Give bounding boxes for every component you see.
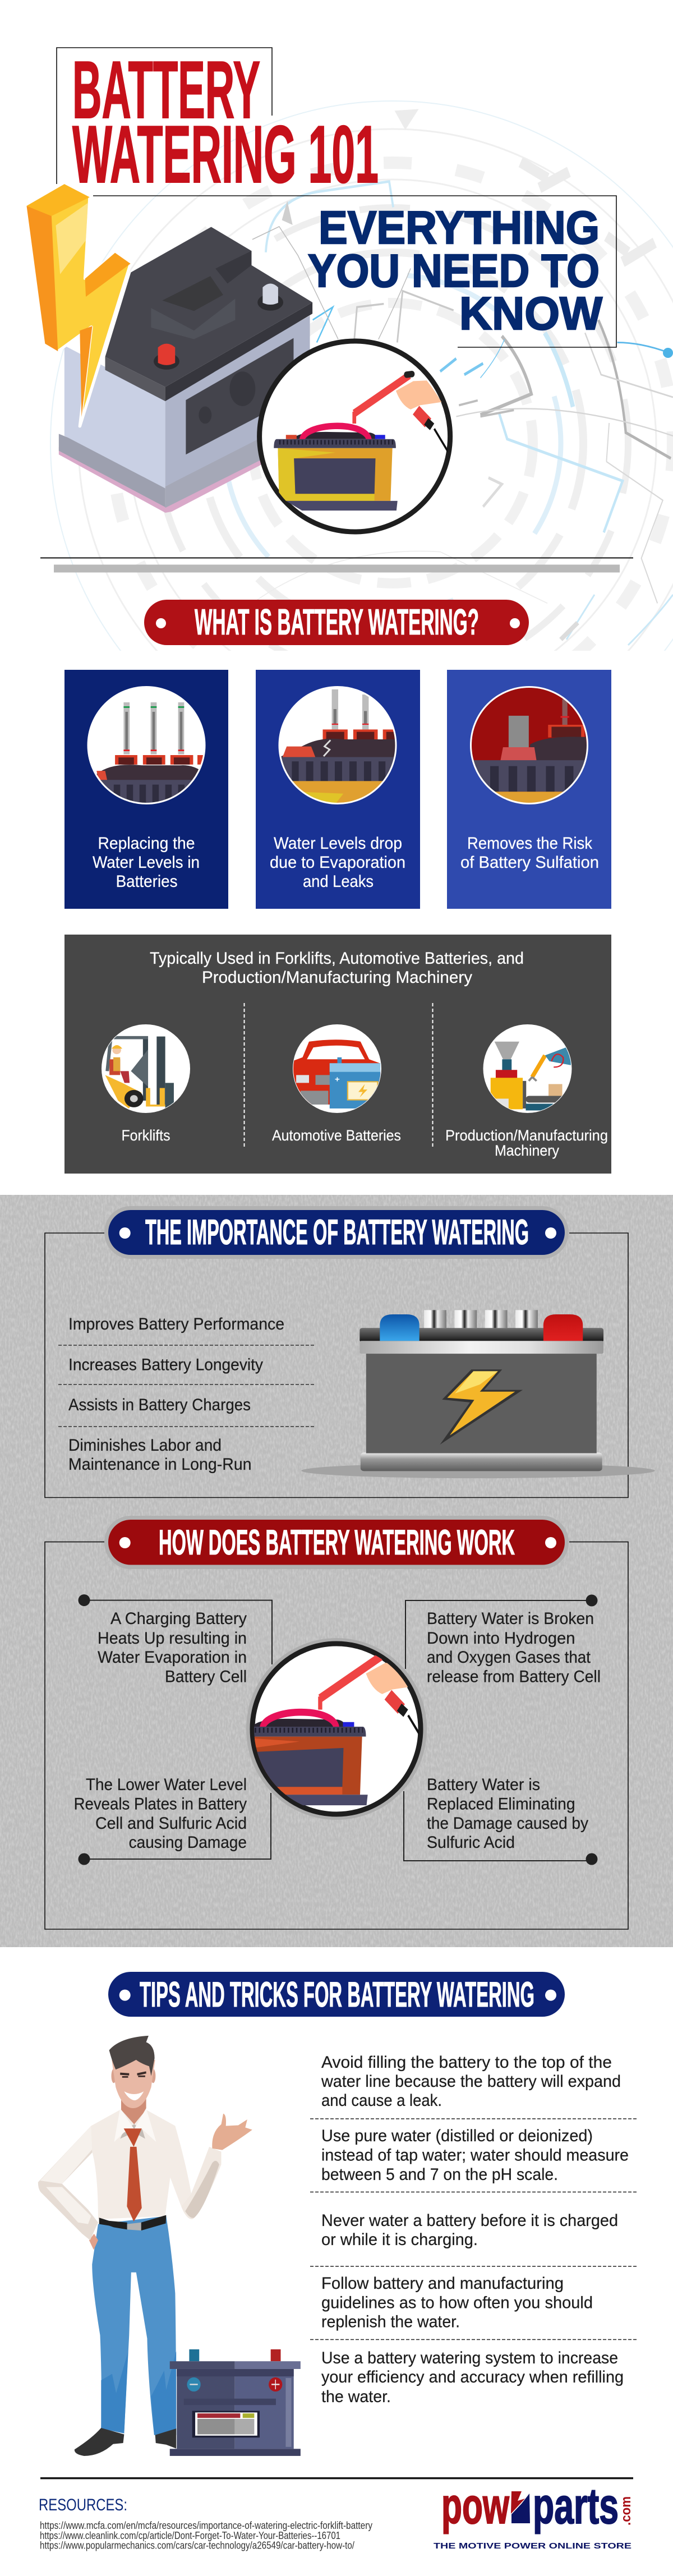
heading pill: What is battery watering [144, 600, 529, 645]
step 1 text: Battery Cell [165, 1668, 247, 1686]
logo: powerparts: parts [533, 2478, 619, 2534]
tip 1 [321, 2053, 621, 2110]
tip 4: Follow battery and manufacturing [321, 2274, 564, 2293]
subtitle: Everything you need to know: YOU NEED TO [308, 245, 600, 297]
tip 2 [321, 2127, 629, 2184]
tip 5: Use a battery watering system to increase [321, 2349, 618, 2367]
list: importance benefits: Increases Battery Longevity [68, 1355, 263, 1374]
title: Battery Watering 101: BATTERY [72, 44, 260, 135]
logo: powerparts: pow [441, 2478, 510, 2534]
title: Battery Watering 101: WATERING 101 [72, 109, 379, 200]
illustration: large car battery with lightning bolt [26, 184, 312, 513]
step 3 text: causing Damage [129, 1833, 247, 1852]
resources heading: RESOURCES: [39, 2496, 127, 2514]
tip 2: between 5 and 7 on the pH scale. [321, 2165, 558, 2184]
text: removes the risk [460, 834, 599, 872]
illustration: watering gun over low-water battery in circle [246, 1638, 427, 1820]
step 2 text [427, 1609, 601, 1686]
text: water levels drop: and Leaks [303, 872, 374, 891]
text: replacing the water levels [93, 834, 200, 891]
heading pill: tips and tricks [108, 1972, 565, 2017]
panel: water levels drop [256, 670, 420, 909]
step 2 text: release from Battery Cell [427, 1668, 601, 1686]
panel: replacing the water levels [64, 670, 228, 909]
footer rule [40, 2477, 633, 2479]
logo: powerparts: THE MOTIVE POWER ONLINE STORE [434, 2542, 631, 2551]
step 4 text: Battery Water is [427, 1775, 540, 1794]
icon: car battery: + [335, 1075, 340, 1084]
connector: step 3 [79, 1793, 271, 1865]
connector dot in background [663, 348, 673, 358]
icon: battery with sulfation [470, 687, 588, 806]
text: water levels drop: due to Evaporation [270, 853, 405, 872]
step 4 text: Sulfuric Acid [427, 1833, 515, 1852]
tip 1: and cause a leak. [321, 2091, 442, 2110]
icon: production machinery [483, 1024, 572, 1113]
step 4 text [427, 1775, 588, 1852]
resources links: https://www.cleanlink.com/cp/article/Dont-Forget-To-Water-Your-Batteries--16701 [40, 2530, 340, 2541]
list: importance benefits: Assists in Battery Charges [68, 1396, 251, 1414]
tip 1: Avoid filling the battery to the top of the [321, 2053, 612, 2072]
title: Battery Watering 101 [72, 44, 379, 200]
step 4 text: Replaced Eliminating [427, 1795, 575, 1813]
tip 1: water line because the battery will expand [321, 2072, 621, 2091]
text: water levels drop: Water Levels drop [274, 834, 402, 853]
icon: car battery [292, 1024, 382, 1113]
subtitle: Everything you need to know: EVERYTHING [319, 201, 600, 254]
panel: removes the risk of sulfation [447, 670, 611, 909]
step 2 text: Battery Water is Broken [427, 1609, 594, 1628]
tip 4 [321, 2274, 593, 2331]
tip 3: or while it is charging. [321, 2230, 478, 2249]
tip 5: the water. [321, 2388, 391, 2406]
tip 4: replenish the water. [321, 2312, 460, 2331]
labels: use cases: Machinery [495, 1142, 559, 1159]
illustration: man presenting [38, 2036, 252, 2456]
icon: battery with crack and low water [279, 687, 397, 804]
list: importance benefits: Diminishes Labor and [68, 1436, 222, 1455]
labels: use cases [121, 1127, 608, 1159]
icon: forklift [102, 1024, 190, 1113]
list: importance benefits: Maintenance in Long-Run [68, 1455, 251, 1474]
tip 2: instead of tap water; water should measure [321, 2146, 629, 2164]
illustration: small battery by man's feet [170, 2349, 301, 2456]
resources links: https://www.mcfa.com/en/mcfa/resources/importance-of-watering-electric-forklift-battery [40, 2520, 372, 2531]
list: importance benefits: Improves Battery Performance [68, 1315, 284, 1333]
divider rule and grey bar [40, 558, 633, 572]
heading: typically used in [150, 949, 524, 987]
heading pill: how does battery watering work [104, 1516, 569, 1569]
labels: use cases: Production/Manufacturing [445, 1127, 608, 1144]
step 3 text: Reveals Plates in Battery [74, 1795, 247, 1813]
step 1 text [98, 1609, 247, 1686]
heading: typically used in: Typically Used in Forklifts, Automotive Batteries, and [150, 949, 524, 968]
step 2 text: Down into Hydrogen [427, 1629, 575, 1648]
text: removes the risk: of Battery Sulfation [460, 853, 599, 872]
subtitle: Everything you need to know [308, 201, 603, 339]
title frame [57, 48, 616, 347]
text: replacing the water levels: Water Levels in [93, 853, 200, 872]
logo: powerparts: .com [619, 2496, 634, 2526]
tip 3 [321, 2211, 618, 2249]
step 4 text: the Damage caused by [427, 1814, 588, 1833]
step 3 text: The Lower Water Level [86, 1775, 247, 1794]
text: replacing the water levels: Batteries [116, 872, 178, 891]
step 2 text: and Oxygen Gases that [427, 1648, 591, 1667]
tip 3: Never water a battery before it is charged [321, 2211, 618, 2230]
text: replacing the water levels: Replacing the [98, 834, 195, 853]
list: importance benefits [58, 1315, 315, 1474]
frame: importance section [45, 1233, 628, 1498]
illustration: watering gun over battery in circle [260, 341, 450, 532]
tip 5: your efficiency and accuracy when refilling [321, 2368, 624, 2386]
resources links [40, 2520, 372, 2551]
step 3 text: Cell and Sulfuric Acid [95, 1814, 247, 1833]
panel: typical uses [64, 935, 611, 1174]
tip 5 [321, 2349, 624, 2406]
icon: battery with full water tubes [88, 687, 206, 806]
step 1 text: Heats Up resulting in [98, 1629, 247, 1648]
subtitle: Everything you need to know: KNOW [459, 287, 603, 339]
background circuit pattern [50, 100, 673, 651]
connector: step 2 [405, 1594, 598, 1669]
step 3 text [74, 1775, 247, 1852]
logo: powerparts [434, 2478, 634, 2551]
connector: step 1 [79, 1594, 272, 1664]
textured grey section background [0, 1195, 673, 1947]
step 1 text: Water Evaporation in [98, 1648, 247, 1667]
text: water levels drop [270, 834, 405, 891]
heading: typically used in: Production/Manufacturing Machinery [202, 968, 472, 987]
tip 2: Use pure water (distilled or deionized) [321, 2127, 593, 2145]
connector: step 4 [404, 1791, 598, 1865]
heading pill: importance of battery watering [104, 1206, 569, 1259]
text: removes the risk: Removes the Risk [467, 834, 593, 853]
labels: use cases: Forklifts [121, 1127, 170, 1144]
resources links: https://www.popularmechanics.com/cars/car-technology/a26549/car-battery-how-to/ [40, 2540, 354, 2551]
frame: how it works section [45, 1542, 628, 1929]
illustration: battery with lightning bolt [301, 1310, 655, 1478]
step 1 text: A Charging Battery [110, 1609, 247, 1628]
labels: use cases: Automotive Batteries [272, 1127, 401, 1144]
tip 4: guidelines as to how often you should [321, 2293, 593, 2312]
